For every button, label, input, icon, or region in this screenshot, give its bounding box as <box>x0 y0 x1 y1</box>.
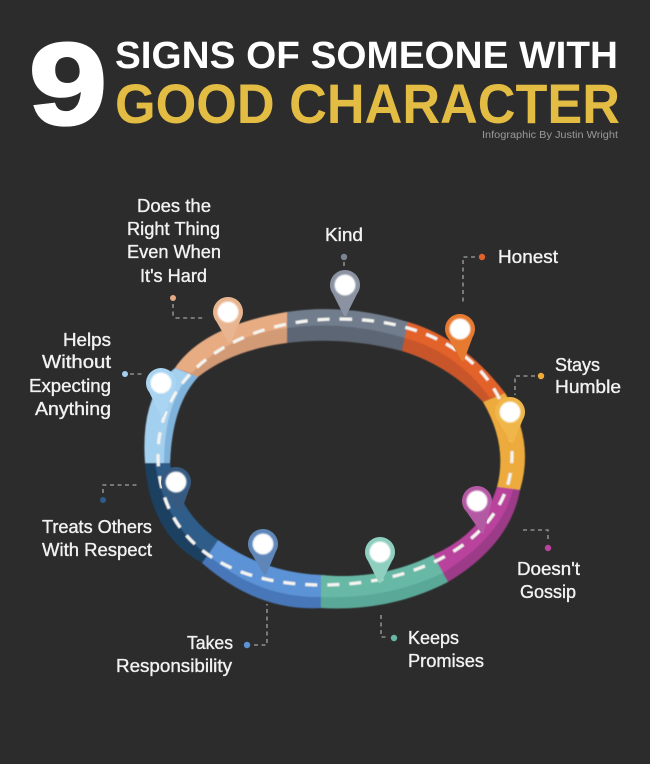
label: treats others with respect: Treats Others <box>42 517 152 537</box>
road segment: teal <box>321 555 448 608</box>
label: helps without expecting anything: Anything <box>35 399 111 419</box>
label: takes responsibility: Takes <box>187 633 233 653</box>
road centre dashes <box>158 319 512 585</box>
credit line: Infographic By Justin Wright <box>482 130 618 141</box>
pin: purple <box>460 484 498 536</box>
label: keeps promises: Keeps <box>408 628 459 648</box>
connector: does the right thing <box>170 295 204 318</box>
label: treats others with respect: With Respect <box>42 540 152 560</box>
connector: honest <box>463 254 485 305</box>
label: helps without expecting anything <box>29 330 111 419</box>
connector: kind <box>341 254 347 268</box>
label: keeps promises <box>408 628 484 671</box>
label: honest: Honest <box>498 247 558 267</box>
label: treats others with respect <box>42 517 152 560</box>
pin: yellow <box>494 396 527 444</box>
label: stays humble: Humble <box>555 377 621 397</box>
label: helps without expecting anything: Expecting <box>29 376 111 396</box>
label: does the right thing even when it's hard: Even When <box>127 242 221 262</box>
label: takes responsibility: Responsibility <box>116 656 232 676</box>
pin: teal <box>365 537 395 583</box>
title <box>29 19 620 149</box>
label: keeps promises: Promises <box>408 651 484 671</box>
connector: doesn't gossip <box>523 530 551 551</box>
pin: dark blue <box>159 465 195 514</box>
label: takes responsibility <box>116 633 233 676</box>
pin: peach <box>212 296 245 344</box>
heading line two: GOOD CHARACTER <box>115 72 620 135</box>
road segment: gray <box>287 309 408 351</box>
label: does the right thing even when it's hard: Does the <box>137 196 211 216</box>
label: does the right thing even when it's hard: It's Hard <box>140 266 207 286</box>
road segment: blue <box>202 540 321 608</box>
connector: keeps promises <box>381 615 397 641</box>
pin: blue <box>247 528 280 576</box>
road segment: yellow <box>483 393 525 490</box>
label: kind: Kind <box>325 225 363 245</box>
label: doesn't gossip: Gossip <box>520 582 576 602</box>
label: doesn't gossip: Doesn't <box>517 559 580 579</box>
road segment: peach <box>175 312 287 377</box>
label: stays humble <box>555 355 621 397</box>
label: helps without expecting anything: Helps <box>63 330 111 350</box>
pin: orange <box>444 313 478 362</box>
ring road <box>144 309 525 608</box>
label: stays humble: Stays <box>555 355 600 375</box>
heading line one: SIGNS OF SOMEONE WITH <box>115 35 618 77</box>
big number nine: 9 <box>29 19 107 149</box>
road segment: dark blue <box>145 463 218 563</box>
connector: treats others <box>100 485 137 503</box>
connector: stays humble <box>515 373 544 395</box>
road segment: light blue <box>144 368 198 463</box>
connector: helps <box>122 371 142 377</box>
road segment: orange <box>402 322 505 402</box>
pin: light blue <box>145 367 177 418</box>
label: helps without expecting anything: Without <box>42 352 111 372</box>
label: does the right thing even when it's hard: Right Thing <box>127 219 220 239</box>
label: does the right thing even when it's hard <box>127 196 221 286</box>
road segment: purple <box>433 487 520 582</box>
pin: gray <box>330 270 360 316</box>
label: doesn't gossip <box>517 559 580 602</box>
connector: takes responsibility <box>244 604 267 648</box>
